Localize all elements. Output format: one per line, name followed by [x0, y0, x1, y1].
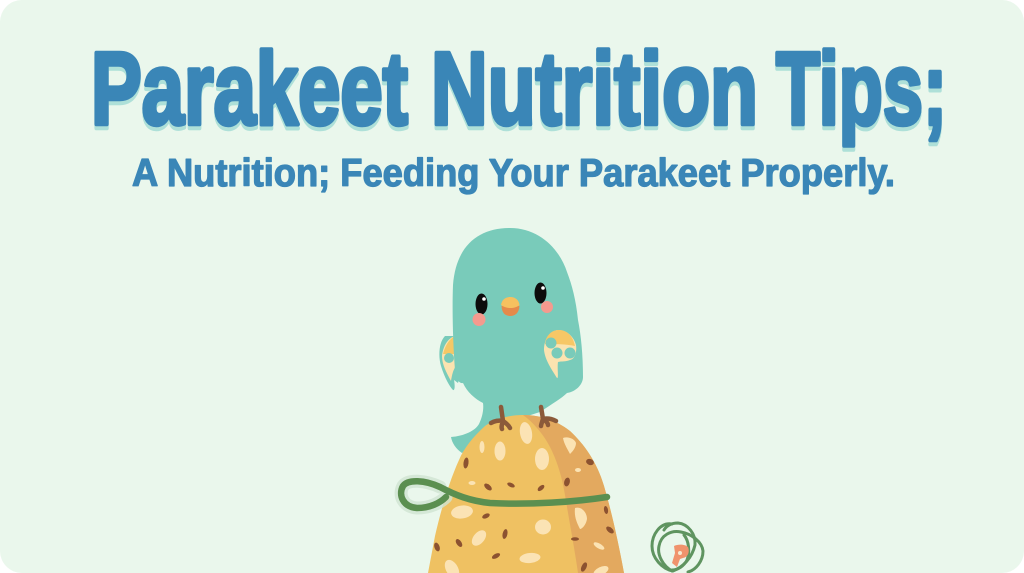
- left eye: [476, 294, 488, 314]
- title: Nutrition: [431, 31, 758, 146]
- pale seeds: [442, 421, 610, 573]
- title: Tips;: [776, 31, 947, 146]
- subtitle: A Nutrition; Feeding Your Parakeet Properly.: [132, 152, 895, 195]
- parakeet: [439, 228, 583, 453]
- seed mound: [428, 415, 624, 573]
- title: Parakeet: [91, 35, 408, 150]
- body and tail: [451, 228, 583, 453]
- parakeet feet: [491, 407, 556, 429]
- green band with loop: [401, 481, 607, 508]
- title: [91, 31, 947, 150]
- icon: tangled green string with orange letter: [652, 523, 703, 572]
- left wing: [439, 336, 462, 390]
- beak: [501, 297, 520, 316]
- left cheek: [472, 313, 486, 326]
- title: Nutrition: [431, 35, 758, 150]
- title: Parakeet: [91, 31, 408, 146]
- dark seeds: [433, 457, 615, 573]
- right cheek: [541, 301, 553, 313]
- illustration: parakeet on seed mound: [401, 228, 624, 573]
- title: Tips;: [776, 35, 947, 150]
- right wing marking: [544, 330, 576, 378]
- right eye: [534, 282, 546, 304]
